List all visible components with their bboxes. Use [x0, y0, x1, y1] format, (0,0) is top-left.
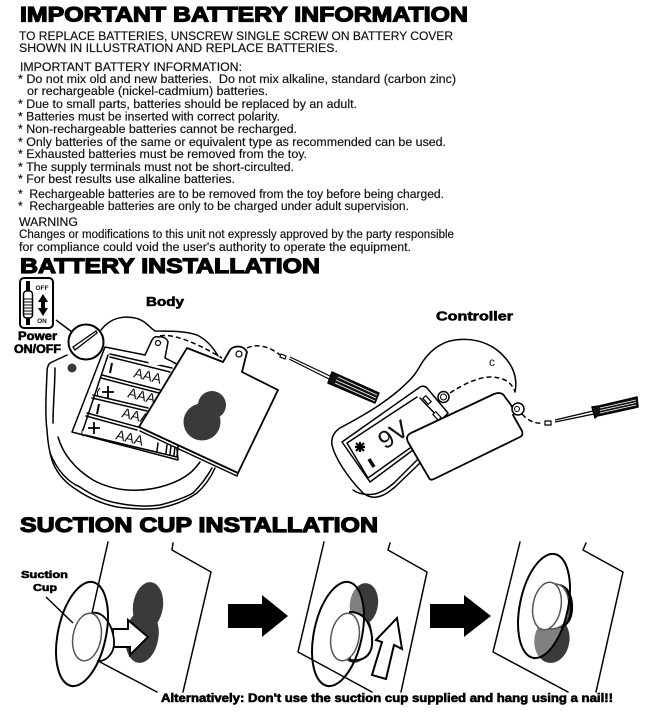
dark mounting hole	[122, 580, 166, 665]
text block: warning: for compliance could void the user's authority to operate the equipment.	[19, 240, 411, 254]
panel: step 3	[493, 542, 623, 692]
suction cup	[92, 613, 114, 661]
label: suction cup: Suction	[21, 569, 68, 581]
text block: important battery information list: * Rechargeable batteries are to be removed from the toy before being charged.	[18, 187, 444, 201]
arrow: step 1 to step 2	[228, 595, 288, 637]
icon: power switch: ON	[37, 318, 47, 325]
text block: important battery information list: or rechargeable (nickel-cadmium) batteries.	[27, 84, 268, 98]
text block: important battery information list: * Batteries must be inserted with correct polarity.	[18, 110, 280, 124]
cup back	[550, 584, 569, 629]
text block: warning: Changes or modifications to this unit not expressly approved by the party responsible	[19, 227, 454, 241]
text block: important battery information list	[18, 60, 456, 213]
body tab	[145, 337, 175, 366]
battery labels	[114, 364, 164, 449]
title: IMPORTANT BATTERY INFORMATION	[20, 4, 468, 26]
cover hole	[184, 391, 226, 440]
power indicator dot	[68, 364, 76, 372]
cover screw hole	[512, 403, 524, 415]
battery compartment	[72, 347, 200, 460]
wall plate	[493, 542, 623, 692]
text block: warning	[19, 215, 454, 254]
wall plate	[92, 542, 211, 692]
icon: power switch	[20, 278, 53, 328]
body outline	[46, 317, 218, 509]
battery labels: AAA	[132, 364, 164, 387]
label: power on/off	[14, 331, 61, 356]
screw	[545, 421, 551, 425]
text block: important battery information list: * The supply terminals must not be short-circulted.	[18, 160, 294, 174]
panel: step 1	[46, 542, 211, 692]
battery labels: AAA	[126, 384, 158, 407]
text block: important battery information list: * Exhausted batteries must be removed from the toy.	[18, 147, 307, 161]
text block: important battery information list: * Due to small parts, batteries should be replaced by an adult.	[18, 97, 357, 111]
heading: suction cup installation: SUCTION CUP INSTALLATION	[20, 514, 378, 537]
panel: step 2	[298, 542, 427, 692]
battery polarity marks	[97, 363, 112, 414]
dashed screw paths	[160, 336, 222, 358]
battery cover	[139, 346, 278, 473]
controller outline	[332, 339, 516, 497]
battery bay	[342, 386, 448, 482]
battery labels: AAA	[114, 426, 146, 449]
9V label: 9V	[373, 415, 414, 455]
9V battery cover	[407, 393, 522, 480]
dark mounting hole	[531, 615, 573, 665]
label: controller: Controller	[436, 308, 513, 324]
text block: important battery information list: * Rechargeable batteries are only to be charged under adult supervision.	[18, 199, 409, 213]
cup back	[350, 612, 372, 660]
text block: important battery information list: * Non-rechargeable batteries cannot be recharged.	[18, 122, 297, 136]
text block: important battery information list: * For best results use alkaline batteries.	[18, 172, 235, 186]
heading: battery installation: BATTERY INSTALLATION	[20, 255, 320, 278]
dark mounting hole	[347, 581, 381, 627]
illustration: controller with 9V battery: c	[489, 355, 495, 369]
wall plate	[298, 542, 427, 692]
arrow: step 2 to step 3	[430, 595, 491, 637]
text block: important battery information list: IMPORTANT BATTERY INFORMATION:	[20, 60, 242, 74]
suction cup pointer	[46, 597, 73, 623]
text block: replacement instructions: TO REPLACE BATTERIES, UNSCREW SINGLE SCREW ON BATTERY COVER	[19, 29, 453, 43]
label: power on/off: Power	[18, 331, 58, 343]
label: power on/off: ON/OFF	[14, 344, 61, 356]
dashed screw paths	[450, 377, 515, 393]
illustration: controller with 9V battery	[332, 339, 638, 497]
callout: alternative nail note: Alternatively: Don't use the suction cup supplied and hang using a nail!!	[161, 693, 613, 705]
text block: replacement instructions	[19, 29, 453, 55]
text block: important battery information list: * Only batteries of the same or equivalent type as recommended can be used.	[18, 135, 446, 149]
icon: power switch: OFF	[36, 285, 49, 292]
label: suction cup: Cup	[33, 582, 57, 594]
icon: zoom circle on power switch	[56, 320, 104, 360]
label: suction cup	[21, 569, 68, 594]
white arrow	[113, 620, 148, 655]
label: body: Body	[146, 294, 185, 309]
screwdriver	[289, 357, 379, 403]
controller tab	[438, 392, 449, 402]
screw	[280, 354, 286, 359]
white up arrow	[372, 618, 402, 679]
battery labels: AAA	[120, 404, 152, 427]
text block: replacement instructions: SHOWN IN ILLUSTRATION AND REPLACE BATTERIES.	[19, 41, 338, 55]
text block: important battery information list: * Do not mix old and new batteries. Do not mix alkaline, standard (carbon zinc)	[18, 72, 456, 86]
screwdriver	[555, 397, 638, 422]
text block: warning: WARNING	[19, 215, 78, 229]
illustration: body unit with AAA batteries	[46, 317, 379, 509]
